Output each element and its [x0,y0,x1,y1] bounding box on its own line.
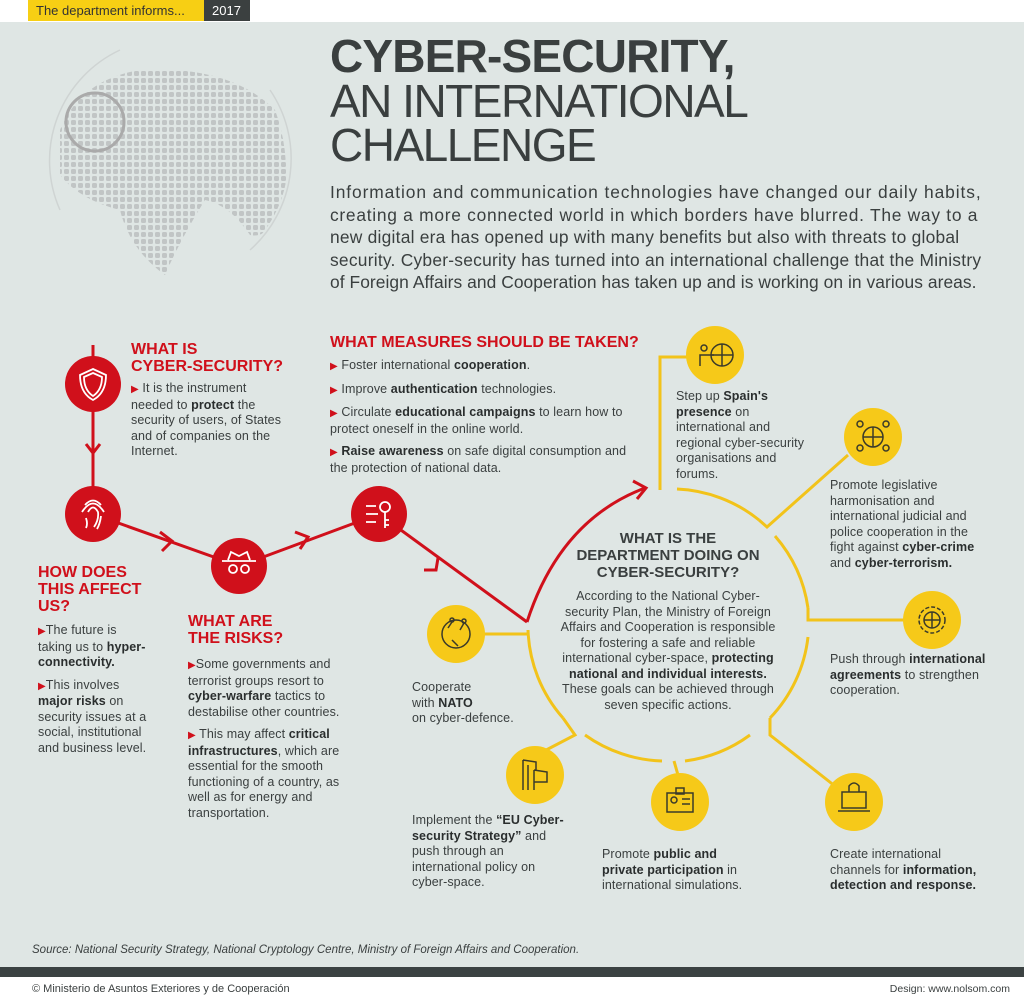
center text: According to the National Cyber-security Plan, the Ministry of Foreign Affairs and Cooperation is responsible for fostering a safe and reliable international cyber-space, protecting national and individual interests. These goals can be achieved through seven specific actions. [561,589,775,712]
action: legislative: Promote legislative harmonisation and international judicial and police cooperation in the fight against cyber-crime and cyber-terrorism. [830,478,974,570]
panel: what are the risks: THE RISKS? [188,630,283,647]
panel: what is cyber-security [131,341,283,458]
panel: what measures: ▶ Raise awareness on safe digital consumption and the protection of national data. [330,444,626,474]
panel: what are the risks: ▶Some governments and terrorist groups resort to cyber-warfare tactics to destabilise other countries. [188,657,340,718]
globe [60,70,286,275]
panel: how does this affect us [38,564,146,754]
header tag: 2017 [212,3,241,18]
graphics [49,50,961,831]
text: Design: www.nolsom.com [890,983,1010,995]
panel: what measures [330,334,639,474]
title: CHALLENGE [330,119,595,171]
action: public private: Promote public and private participation in international simulations. [602,847,742,892]
yellow circle segments [482,357,905,790]
panel: how does this affect us: HOW DOES [38,564,127,581]
center text [560,530,775,712]
panel: what are the risks [188,613,340,820]
panel: what measures: ▶ Circulate educational campaigns to learn how to protect oneself in the online world. [330,405,623,436]
action: channels: Create international channels for information, detection and response. [830,847,976,892]
panel: how does this affect us: US? [38,598,70,615]
panel: what are the risks: ▶ This may affect critical infrastructures, which are essential for the smooth functioning of a country, as well as for energy and transportation. [188,727,339,820]
source: Source: National Security Strategy, National Cryptology Centre, Ministry of Foreign Affairs and Cooperation. [32,944,579,956]
yellow icons [427,326,961,831]
header tag: The department informs... [36,3,185,18]
panel: what is cyber-security: CYBER-SECURITY? [131,358,283,375]
panel: what is cyber-security: ▶ It is the instrument needed to protect the security of users, of States and of companies on the Internet. [131,381,281,458]
action: NATO: with NATO [412,696,473,710]
intro text: of Foreign Affairs and Cooperation has taken up and is working on in various areas. [330,272,977,292]
red icons [65,356,407,594]
action: NATO [412,680,514,725]
center text: WHAT IS THE DEPARTMENT DOING ON CYBER-SECURITY? [576,530,760,581]
title [330,30,748,171]
intro text: creating a more connected world in which borders have blurred. The way to a [330,205,978,225]
red path [86,345,646,622]
panel: how does this affect us: ▶This involves major risks on security issues at a social, institutional and business level. [38,678,146,754]
intro text [330,182,982,292]
title: CYBER-SECURITY, [330,30,735,82]
action: NATO: on cyber-defence. [412,711,514,725]
intro text: Information and communication technologies have changed our daily habits, [330,182,982,202]
action: EU strategy: Implement the “EU Cyber-security Strategy” and push through an international policy on cyber-space. [412,813,564,889]
action: NATO: Cooperate [412,680,471,694]
panel: what is cyber-security: WHAT IS [131,341,197,358]
panel: how does this affect us: THIS AFFECT [38,581,141,598]
footer bar [0,967,1024,977]
panel: what measures: ▶ Foster international cooperation. [330,358,530,372]
intro text: new digital era has opened up with many benefits but also with threats to global [330,227,959,247]
footer text: © Ministerio de Asuntos Exteriores y de Cooperación [32,983,290,995]
intro text: security. Cyber-security has turned into an international challenge that the Ministry [330,250,981,270]
header tag [28,0,250,21]
panel: what measures: ▶ Improve authentication technologies. [330,382,556,396]
action: Spain presence: Step up Spain's presence on international and regional cyber-security organisations and forums. [676,389,804,480]
action: agreements: Push through international agreements to strengthen cooperation. [830,652,985,697]
title: AN INTERNATIONAL [330,74,747,126]
panel: what are the risks: WHAT ARE [188,613,272,630]
locator ring [66,93,124,151]
panel: what measures: WHAT MEASURES SHOULD BE TAKEN? [330,334,639,351]
panel: how does this affect us: ▶The future is taking us to hyper-connectivity. [38,623,146,669]
